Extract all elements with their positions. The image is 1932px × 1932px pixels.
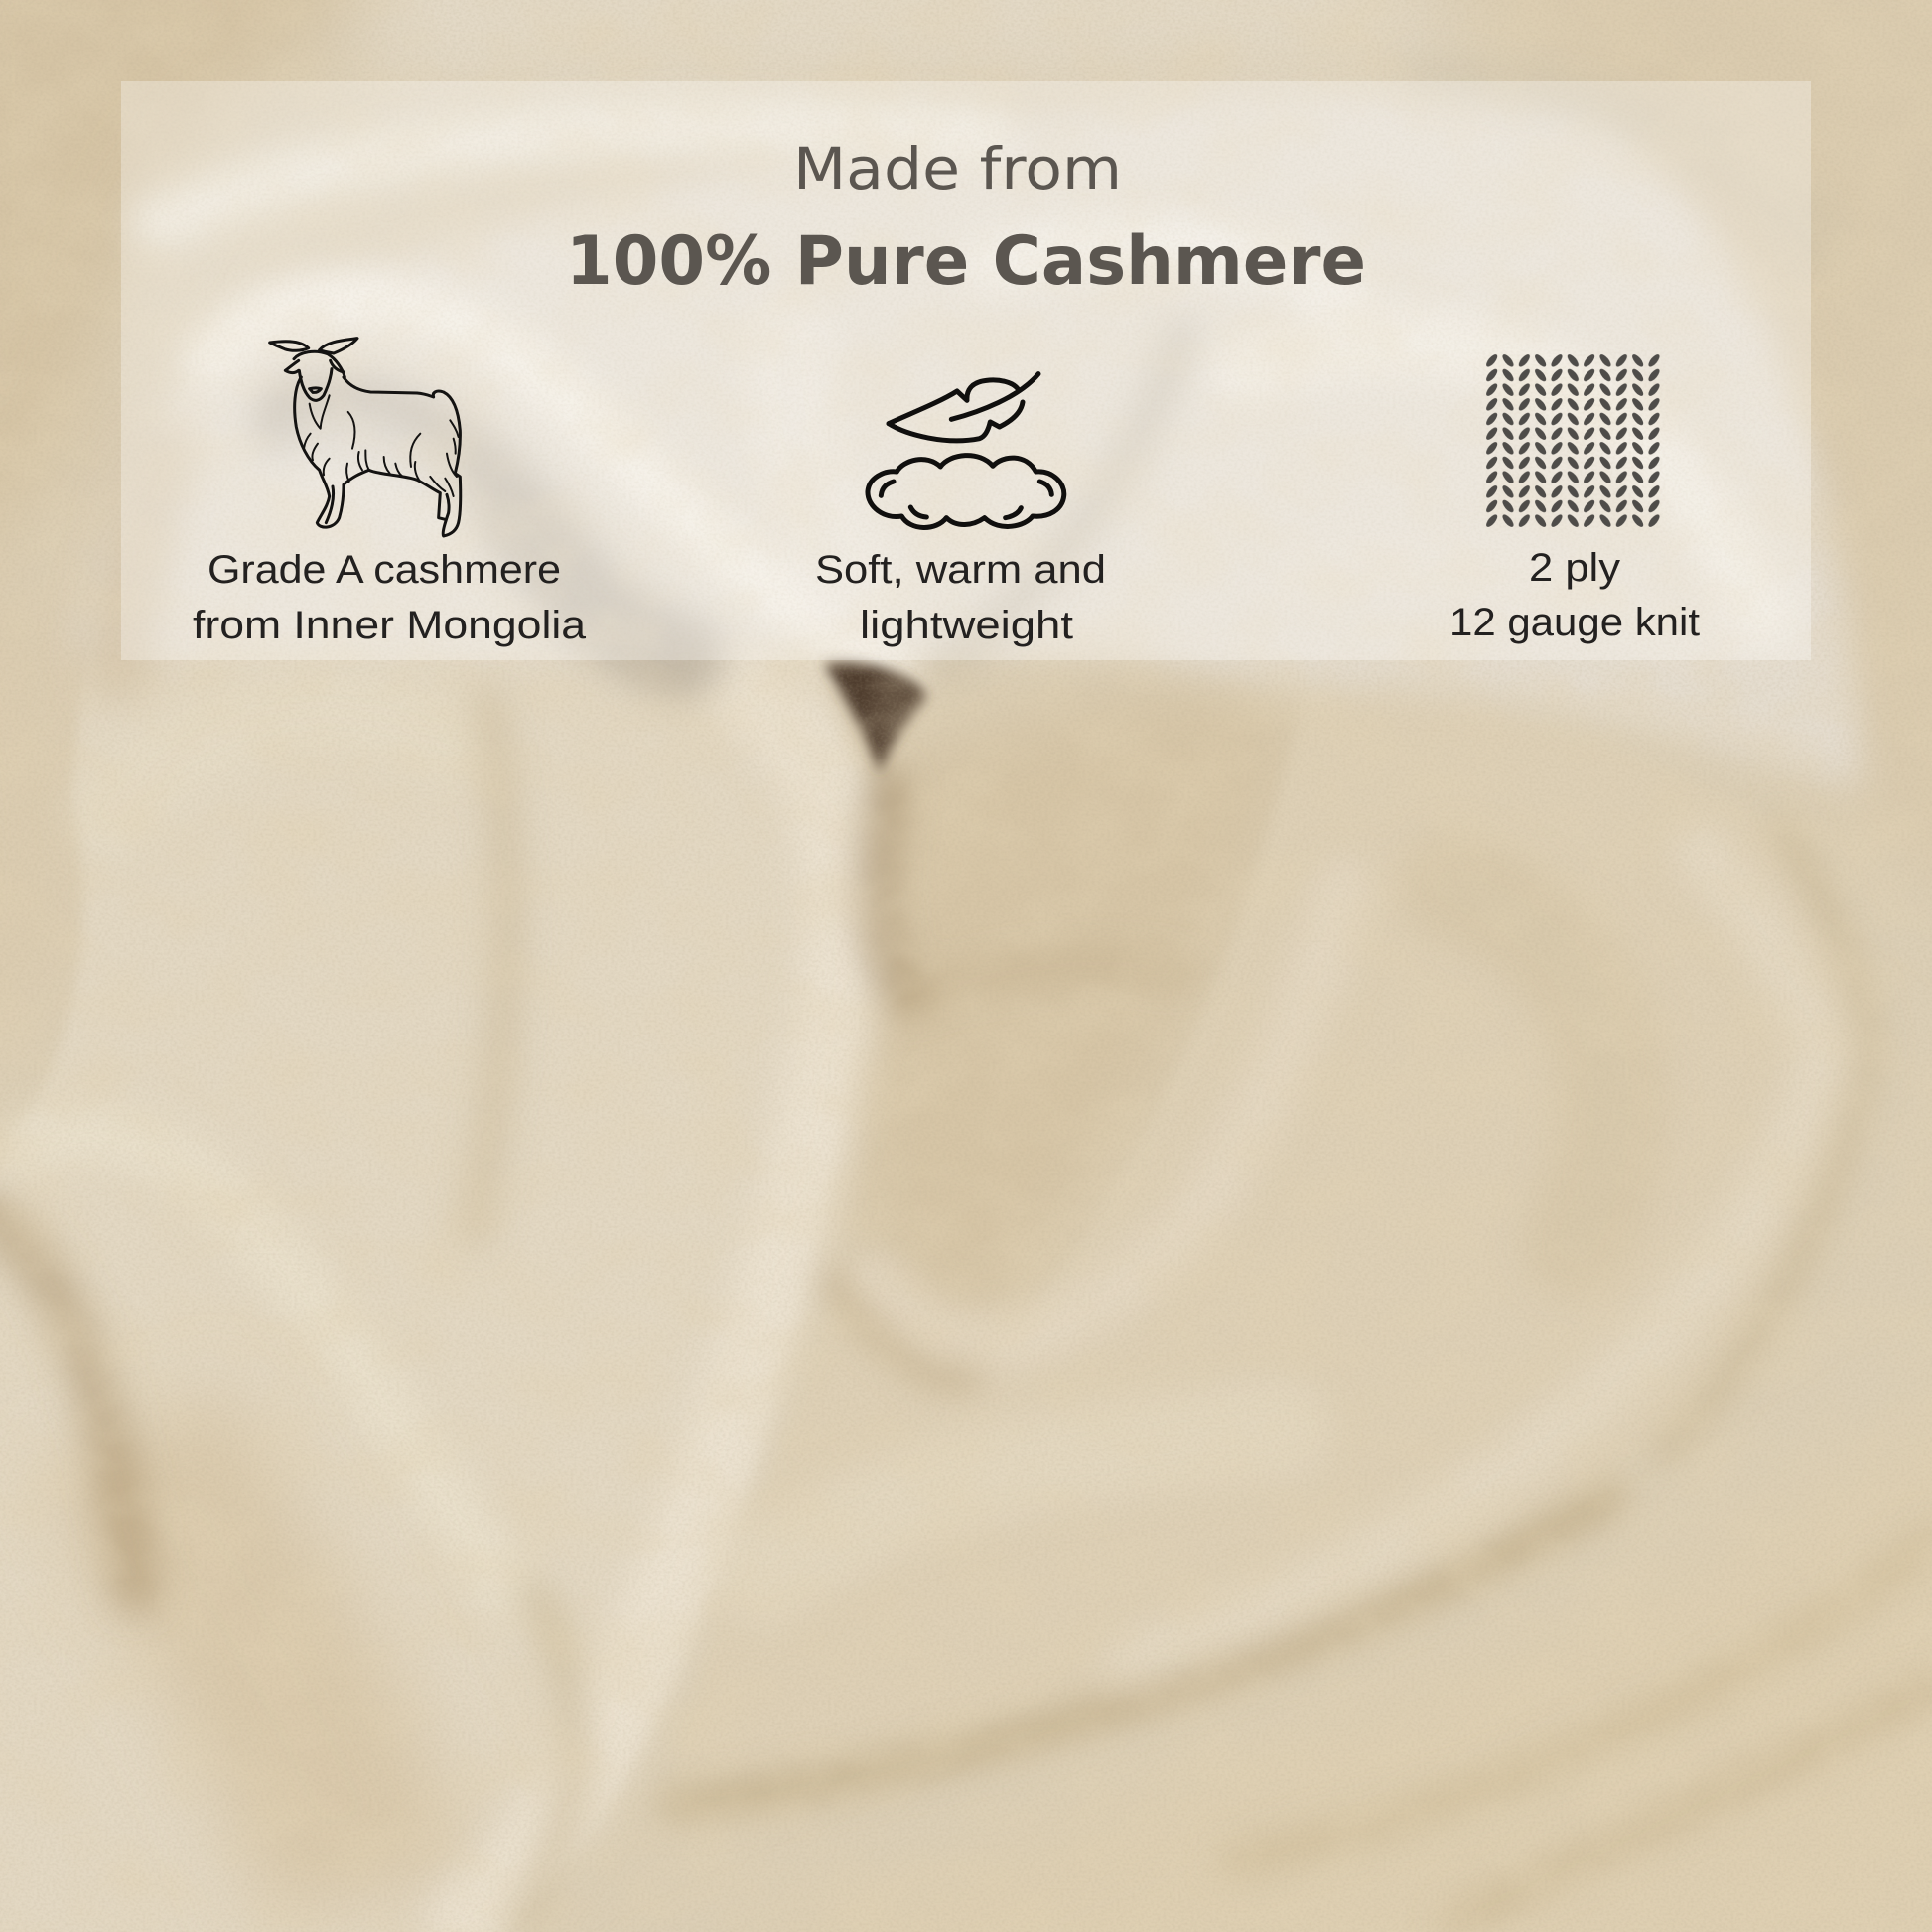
label: soft, warm and lightweight: lightweight bbox=[860, 604, 1073, 647]
icon: feather above cloud bbox=[868, 374, 1064, 527]
icon: knit stitch swatch bbox=[1484, 353, 1662, 528]
heading: Made from: Made from bbox=[793, 135, 1122, 203]
label: 2 ply 12 gauge knit bbox=[1449, 546, 1700, 644]
translucent header panel bbox=[121, 81, 1811, 660]
label: 2 ply 12 gauge knit: 12 gauge knit bbox=[1449, 601, 1700, 644]
label: soft, warm and lightweight bbox=[815, 548, 1106, 647]
label: 2 ply 12 gauge knit: 2 ply bbox=[1529, 546, 1620, 590]
label: Grade A cashmere: from Inner Mongolia bbox=[193, 604, 587, 647]
heading: 100% Pure Cashmere: 100% Pure Cashmere bbox=[566, 222, 1366, 301]
icon: goat bbox=[270, 339, 461, 536]
label: soft, warm and lightweight: Soft, warm and bbox=[815, 548, 1106, 592]
upper sheet behind panel bbox=[73, 92, 1861, 788]
fabric sheets bbox=[0, 333, 1858, 1932]
label: Grade A cashmere bbox=[193, 548, 587, 647]
folds seen behind panel bbox=[296, 415, 684, 659]
lower-left tan shading bbox=[136, 1430, 369, 1897]
label: Grade A cashmere: Grade A cashmere bbox=[207, 548, 561, 592]
fabric folds bbox=[469, 690, 841, 1922]
